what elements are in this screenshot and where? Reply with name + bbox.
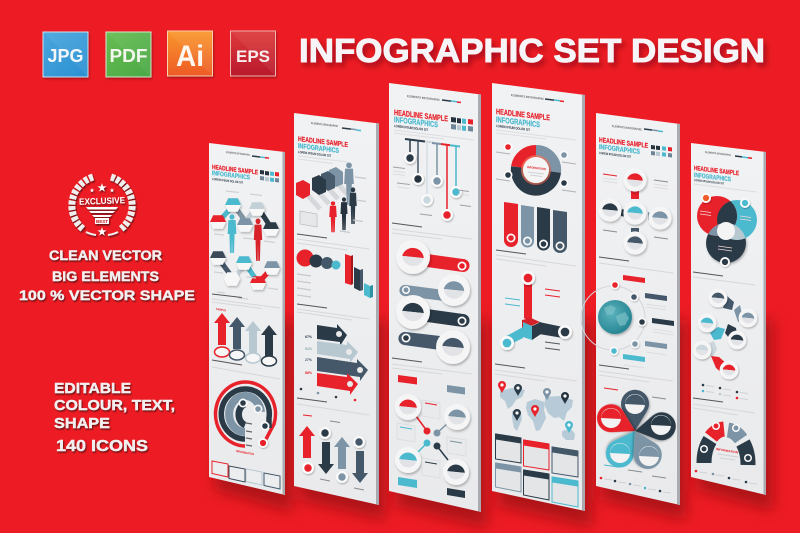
panel 3 header: ELEMENTS INFOGRAPHIC	[407, 94, 441, 102]
panel 1 header: ELEMENTS INFOGRAPHIC	[226, 150, 250, 157]
panel 6 header: INFOGRAPHICS	[694, 172, 731, 183]
hanging circles chart	[393, 139, 471, 221]
panel 6 header: LOREM IPSUM DOLOR SIT	[694, 178, 724, 186]
icon: exclusive badge	[72, 177, 132, 238]
feature list: vector: CLEAN VECTOR	[49, 247, 162, 263]
arrow bars chart	[300, 324, 368, 401]
icon: exclusive badge: ★	[98, 183, 107, 194]
panel 5 legend	[600, 477, 671, 493]
up and down arrows chart	[299, 415, 368, 490]
panel 5: circles, globe, teardrops	[581, 113, 680, 505]
icon: PDF	[106, 32, 151, 77]
teardrop petals chart	[592, 388, 678, 478]
panel 5 header: HEADLINE SAMPLE	[599, 137, 648, 150]
icon: exclusive badge: EXCLUSIVE	[79, 195, 125, 207]
venn diagram	[697, 193, 757, 267]
circles cluster chart	[598, 168, 672, 255]
icon: exclusive badge: BEST	[96, 219, 108, 224]
arrow bars chart: 51%	[305, 347, 313, 351]
zigzag chart 2	[210, 251, 280, 299]
arrows chart: SAMPLE	[216, 307, 226, 312]
feature list: editable: EDITABLE	[54, 380, 131, 397]
feature list: vector	[19, 247, 195, 303]
feature list: editable: COLOUR, TEXT,	[54, 397, 175, 414]
ring caption: INFORMATION	[236, 449, 254, 456]
feature list: editable: 140 ICONS	[56, 438, 148, 455]
ring chart	[216, 382, 276, 448]
format icons row	[43, 31, 276, 77]
arrows chart	[214, 307, 277, 366]
semi-circle gauge chart	[700, 422, 752, 465]
icon: exclusive badge: ★	[90, 188, 95, 194]
arrow bars chart: 86%	[305, 371, 313, 375]
panel 2 header: HEADLINE SAMPLE	[298, 136, 348, 149]
panel 6 header	[694, 150, 756, 192]
panel 6 header: ELEMENTS INFOGRAPHIC	[705, 150, 731, 157]
icon: Ai: Ai	[176, 40, 204, 73]
globe chart	[581, 275, 674, 368]
feature list: vector: BIG ELEMENTS	[52, 268, 159, 284]
panel 6: venn, hexagon ring, gauge	[691, 143, 766, 495]
panel 6 legend 2	[695, 470, 757, 484]
zigzag chart 1	[210, 191, 279, 261]
panel 1: zigzag, arrows and ring	[209, 143, 285, 495]
panel 1 header	[212, 150, 279, 185]
isometric cubes and people	[296, 162, 366, 232]
panel 4 header	[496, 93, 576, 140]
panel 2 header	[298, 121, 361, 164]
feature list: editable: SHAPE	[54, 415, 110, 432]
arrow bars chart: 27%	[305, 358, 313, 362]
feature list: vector: 100 % VECTOR SHAPE	[19, 287, 195, 303]
panel 4 header: HEADLINE SAMPLE	[496, 107, 550, 123]
pill bars chart	[396, 240, 470, 364]
panel 3 header: HEADLINE SAMPLE	[394, 108, 448, 124]
panel 5 header: ELEMENTS INFOGRAPHIC	[612, 124, 643, 132]
panel 4 header: ELEMENTS INFOGRAPHIC	[511, 93, 545, 101]
panel shadows	[215, 320, 773, 528]
panel 4 header: INFOGRAPHICS	[496, 115, 540, 129]
icon: JPG	[43, 32, 88, 77]
three-way hub chart	[500, 271, 572, 350]
network chart	[395, 375, 470, 498]
icon: Ai	[168, 31, 212, 76]
panel 1 header: LOREM IPSUM DOLOR SIT	[212, 177, 243, 185]
panel 4: donut, bars, hub, map, tables	[492, 83, 585, 511]
panel 1 header: HEADLINE SAMPLE	[212, 164, 258, 177]
circles and bars chart	[296, 250, 373, 298]
icon: PDF: PDF	[110, 46, 148, 66]
panel 3 header: INFOGRAPHICS	[394, 115, 438, 129]
icon: EPS	[230, 31, 276, 76]
feature list: editable	[54, 380, 175, 455]
panel 2 header: INFOGRAPHICS	[298, 143, 339, 155]
title: INFOGRAPHIC SET DESIGN	[299, 32, 765, 69]
panel 3 header: LOREM IPSUM DOLOR SIT	[394, 124, 429, 132]
panel 2 header: LOREM IPSUM DOLOR SIT	[298, 150, 331, 158]
vertical bars chart	[504, 202, 567, 253]
icon: exclusive badge: ★	[98, 227, 107, 238]
panel 3: hanging circles, pill bars, network	[389, 83, 481, 512]
donut chart	[496, 142, 576, 192]
icon: JPG: JPG	[48, 46, 84, 66]
panel 6 header: HEADLINE SAMPLE	[694, 165, 739, 177]
world map with pins	[498, 381, 575, 440]
panel 5 header: INFOGRAPHICS	[599, 144, 640, 156]
donut chart: INFORMATION	[527, 165, 546, 171]
panel 4 header: LOREM IPSUM DOLOR SIT	[496, 124, 531, 132]
icon: EPS: EPS	[236, 47, 270, 66]
hexagon ring chart	[693, 289, 757, 379]
panel 5 header	[599, 124, 672, 159]
icon: exclusive badge: ★	[110, 188, 115, 194]
panel 2 header: ELEMENTS INFOGRAPHIC	[311, 121, 339, 128]
info boxes	[212, 461, 280, 489]
arrow bars chart: 67%	[305, 335, 313, 339]
panel 3 header	[394, 94, 474, 140]
panel 1 header: INFOGRAPHICS	[212, 170, 250, 182]
tables grid	[496, 434, 578, 507]
panel 2: cubes, arrows	[294, 113, 379, 505]
panel 5 header: LOREM IPSUM DOLOR SIT	[599, 151, 631, 159]
panel 6 legend 1	[702, 384, 748, 400]
semi-circle gauge chart: INFORMATION	[716, 447, 738, 455]
